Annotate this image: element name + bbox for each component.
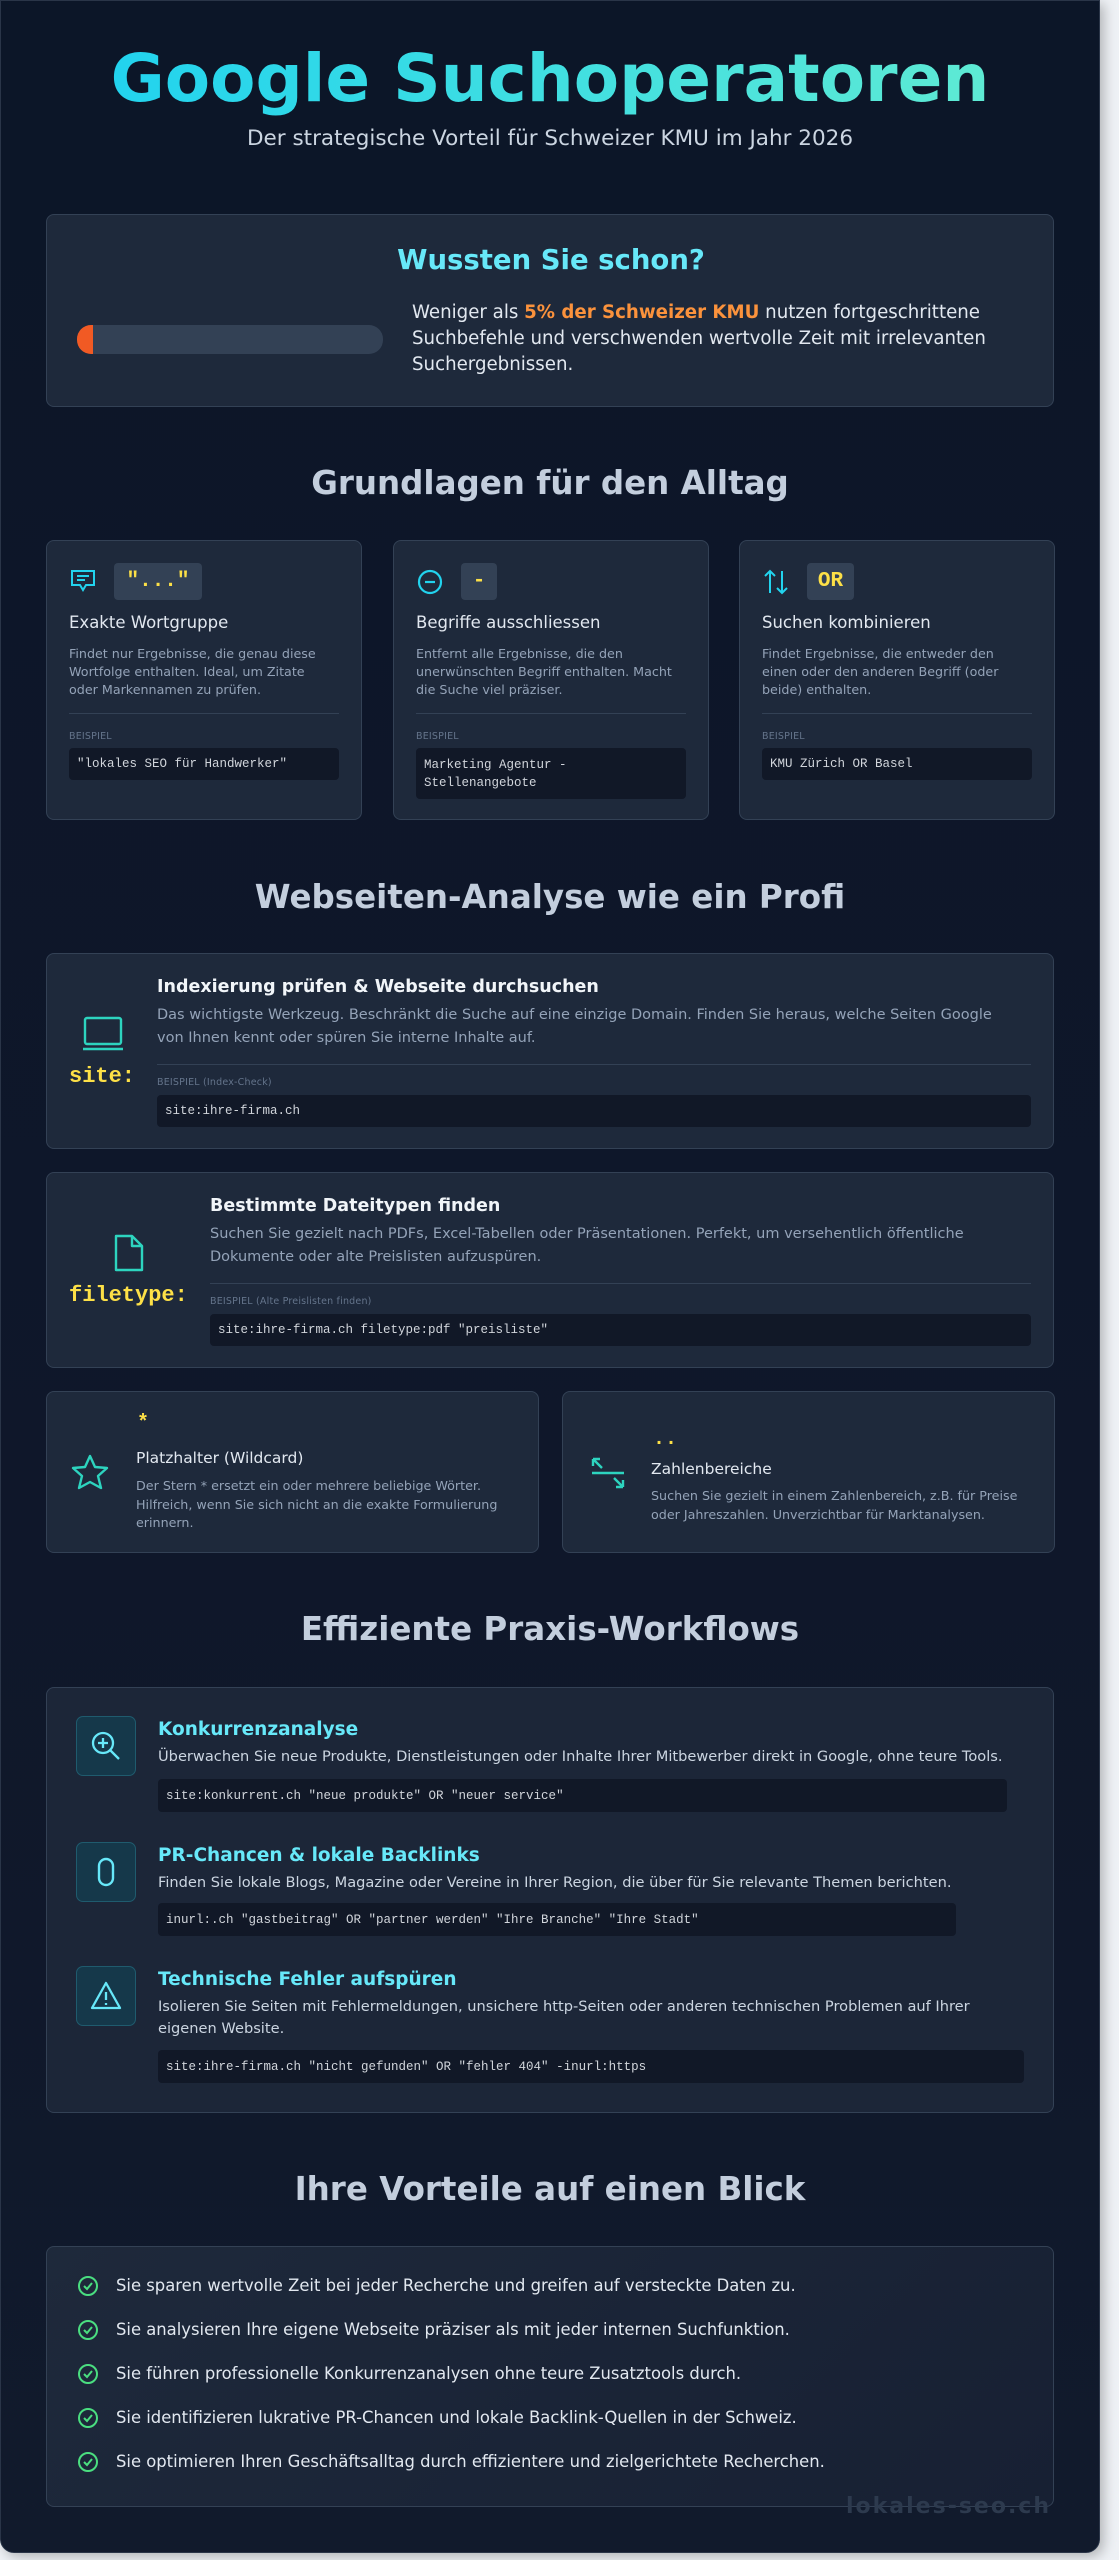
code example: site:ihre-firma.ch [165,1104,300,1118]
title: Google Suchoperatoren [111,40,989,117]
code example: inurl:.ch "gastbeitrag" OR "partner werden" "Ihre Branche" "Ihre Stadt" [166,1912,699,1926]
benefit list: Sie sparen wertvolle Zeit bei jeder Recherche und greifen auf versteckte Daten zu. [116,2276,796,2295]
code example: Marketing Agentur - [424,758,567,772]
badge: quotes [114,563,202,600]
benefit list: Sie analysieren Ihre eigene Webseite präziser als mit jeder internen Suchfunktion. [116,2320,790,2339]
code example [157,1095,1031,1127]
panel: filetype operator: Suchen Sie gezielt nach PDFs, Excel-Tabellen oder Präsentationen. Perfekt, um versehentlich öffentliche Dokumente oder alte Preislisten aufzuspüren. [210,1226,964,1265]
icon: minus circle [418,570,442,594]
panel: filetype operator: BEISPIEL (Alte Preislisten finden) [210,1296,372,1307]
heading: Wussten Sie schon: Wussten Sie schon? [397,244,705,276]
panel: wildcard: Platzhalter (Wildcard) [136,1449,303,1467]
operator label: site: site: [69,1064,135,1089]
code example: site:konkurrent.ch "neue produkte" OR "neuer service" [166,1788,564,1802]
workflow: Konkurrenzanalyse: Konkurrenzanalyse [158,1719,358,1740]
code example [158,1779,1007,1812]
panel: benefits [46,2246,1054,2507]
panel: filetype operator [46,1172,1054,1368]
panel: Exakte Wortgruppe: BEISPIEL [69,731,112,742]
code example: KMU Zürich OR Basel [770,757,913,771]
panel: site operator: BEISPIEL (Index-Check) [157,1077,272,1088]
badge: OR [807,563,854,600]
code example [158,1903,956,1936]
workflow: Konkurrenzanalyse [76,1716,1007,1812]
code example [762,748,1032,780]
workflow: PR-Chancen [76,1842,956,1936]
panel: Begriffe ausschliessen: BEISPIEL [416,731,459,742]
workflow: Technische Fehler [76,1966,1024,2083]
panel: Wussten Sie schon [46,214,1054,407]
icon: message [71,570,95,592]
operator label: filetype: filetype: [69,1283,188,1308]
code example: Stellenangebote [424,776,537,790]
badge: minus: - [473,570,485,593]
panel: Suchen kombinieren: Suchen kombinieren [762,613,931,632]
benefit list: Sie identifizieren lukrative PR-Chancen und lokale Backlink-Quellen in der Schweiz. [116,2408,797,2427]
panel: site operator: Das wichtigste Werkzeug. Beschränkt die Suche auf eine einzige Domain. Finden Sie heraus, welche Seiten Google von Ihnen kennt oder spüren Sie interne Inhalte auf. [157,1007,992,1046]
badge: minus [461,563,497,600]
benefit list: Sie führen professionelle Konkurrenzanalysen ohne teure Zusatztools durch. [116,2364,741,2383]
icon: ring [76,1842,136,1902]
icon: star [72,1454,108,1490]
code example [416,748,686,799]
code example: site:ihre-firma.ch filetype:pdf "preisliste" [218,1323,548,1337]
panel: Begriffe ausschliessen [393,540,709,820]
panel: Zahlenbereiche [562,1391,1055,1553]
panel: Zahlenbereiche: Zahlenbereiche [651,1460,772,1478]
panel: Suchen kombinieren: Findet Ergebnisse, die entweder den einen oder den anderen Begriff (oder beide) enthalten. [762,646,998,697]
panel: Suchen kombinieren: BEISPIEL [762,731,805,742]
workflow: PR-Chancen: PR-Chancen & lokale Backlinks [158,1845,480,1866]
icon: file [114,1234,144,1272]
panel: Exakte Wortgruppe: Exakte Wortgruppe [69,613,228,632]
panel: Begriffe ausschliessen: Entfernt alle Ergebnisse, die den unerwünschten Begriff enthalten. Macht die Suche viel präziser. [416,646,672,697]
text block: statistic: Weniger als 5% der Schweizer KMU nutzen fortgeschrittene Suchbefehle und verschwenden wertvolle Zeit mit irrelevanten Suchergebnissen. [412,302,986,375]
icon: arrows up down [764,570,788,594]
workflow: PR-Chancen: Finden Sie lokale Blogs, Magazine oder Vereine in Ihrer Region, die über für Sie relevante Themen berichten. [158,1874,951,1891]
panel: wildcard [46,1391,539,1553]
heading: Workflows: Effiziente Praxis-Workflows [301,1610,799,1648]
code example [158,2050,1024,2083]
panel: workflows [46,1687,1054,2113]
code example: "lokales SEO für Handwerker" [77,757,287,771]
workflow: Konkurrenzanalyse: Überwachen Sie neue Produkte, Dienstleistungen oder Inhalte Ihrer Mitbewerber direkt in Google, ohne teure Tools. [158,1748,1003,1765]
panel: Exakte Wortgruppe: Findet nur Ergebnisse, die genau diese Wortfolge enthalten. Ideal, um Zitate oder Markennamen zu prüfen. [69,646,316,697]
bar chart: 5% [77,325,383,354]
heading: Grundlagen: Grundlagen für den Alltag [311,464,789,502]
code example [69,748,339,780]
icon: warning [76,1966,136,2026]
panel: Zahlenbereiche: Suchen Sie gezielt in einem Zahlenbereich, z.B. für Preise oder Jahreszahlen. Unverzichtbar für Marktanalysen. [651,1488,1017,1522]
icon: range arrows [592,1458,624,1488]
panel: Begriffe ausschliessen: Begriffe ausschliessen [416,613,600,632]
benefit list: Sie optimieren Ihren Geschäftsalltag durch effizientere und zielgerichtete Recherchen. [116,2452,825,2471]
workflow: Technische Fehler: Technische Fehler aufspüren [158,1969,457,1990]
badge: OR: OR [818,570,843,593]
panel: Exakte Wortgruppe [46,540,362,820]
heading: Vorteile: Ihre Vorteile auf einen Blick [295,2170,805,2208]
code example: site:ihre-firma.ch "nicht gefunden" OR "fehler 404" -inurl:https [166,2060,646,2074]
panel: Suchen kombinieren [739,540,1055,820]
panel: wildcard: Der Stern * ersetzt ein oder mehrere beliebige Wörter. Hilfreich, wenn Sie sich nicht an die exakte Formulierung erinnern. [136,1478,497,1530]
icon: laptop [83,1016,123,1050]
heading: Webseiten-Analyse: Webseiten-Analyse wie ein Profi [255,878,845,916]
benefit list [78,2276,825,2472]
subtitle: Der strategische Vorteil für Schweizer KMU im Jahr 2026 [247,126,853,151]
code example [210,1314,1031,1346]
badge: quotes: "..." [126,570,190,593]
panel: filetype operator: Bestimmte Dateitypen finden [210,1196,500,1216]
icon: zoom plus [76,1716,136,1776]
operator: range: .. [653,1428,677,1451]
panel: site operator [46,953,1054,1149]
workflow: Technische Fehler: Isolieren Sie Seiten mit Fehlermeldungen, unsichere http-Seiten oder anderen technischen Problemen auf Ihrer eigenen Website. [158,1998,970,2037]
panel: site operator: Indexierung prüfen & Webseite durchsuchen [157,977,599,997]
watermark: lokales-seo.ch [846,2494,1051,2519]
operator: star: * [137,1412,149,1435]
